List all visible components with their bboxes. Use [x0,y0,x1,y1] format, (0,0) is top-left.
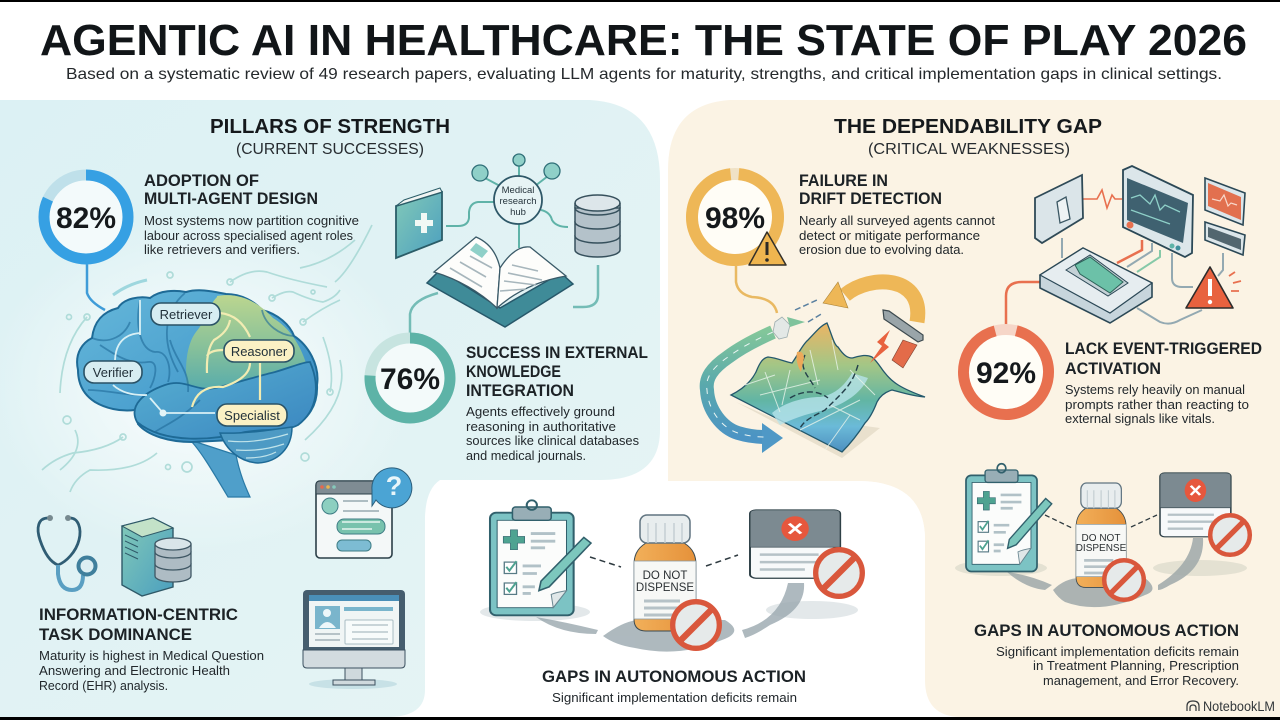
connectors: knowledge hub to ring 76 [410,265,598,334]
ring: 76 percent [370,338,450,418]
text block: gaps in autonomous action centre: Significant implementation deficits remain [552,691,797,705]
text block: information-centric task dominance: Answering and Electronic Health [39,664,230,678]
heading: dependability gap: THE DEPENDABILITY GAP [834,116,1102,138]
role label: Reasoner: Reasoner [231,344,288,359]
icon: warning triangle [749,232,786,265]
illustration: monitor and event switch [1035,166,1245,324]
icon: stethoscope [38,515,96,590]
ring: 92 percent [954,320,1058,424]
ring: 82 percent [44,175,128,259]
illustration: central autonomous action gaps [480,500,862,652]
text block: drift detection: DRIFT DETECTION [799,190,942,208]
small dark screen [1205,222,1245,255]
medicine bottle: DO NOT [1082,533,1120,544]
heading: pillars of strength: PILLARS OF STRENGTH [210,116,450,138]
role label: Verifier [84,361,142,383]
ring: 92 percent: 92% [976,357,1036,390]
text block: event-triggered activation: external signals like vitals. [1065,412,1215,426]
clipboard [490,500,591,615]
icon: chat window with question: ? [386,471,402,501]
illustration: drift map with arrows [707,282,925,458]
role label: Specialist: Specialist [224,408,280,423]
icon: open book [427,237,573,327]
text block: event-triggered activation: prompts rather than reacting to [1065,398,1249,412]
text block: information-centric task dominance: TASK DOMINANCE [39,626,192,644]
heading: pillars of strength: (CURRENT SUCCESSES) [236,141,424,158]
text block: multi-agent design [144,172,359,257]
role label: Reasoner [224,340,294,362]
alert triangle [1186,267,1241,308]
medicine bottle: DISPENSE [1076,543,1127,554]
ring: 76 percent: 76% [380,363,440,396]
text block: external knowledge integration: Agents effectively ground [466,405,615,419]
title: AGENTIC AI IN HEALTHCARE: THE STATE OF PLAY 2026 [40,16,1247,65]
hub circle: research [500,196,536,207]
brain folds [88,293,293,432]
text block: external knowledge integration: KNOWLEDGE [466,363,561,381]
connector: ring 82 to brain [87,264,105,310]
role label: Specialist [217,404,287,426]
text block: event-triggered activation: LACK EVENT-TRIGGERED [1065,340,1262,358]
icon: server with database [122,518,191,596]
map river band [772,373,868,425]
hub circle [494,176,542,224]
text block: multi-agent design: like retrievers and verifiers. [144,243,300,257]
role label: Verifier: Verifier [93,365,134,380]
heading: dependability gap [834,116,1102,158]
medicine bottle: DISPENSE [636,582,694,594]
icon: database [575,195,620,257]
medicine bottle [634,515,696,631]
icon: chat window with question [316,468,412,558]
panel: pillars of strength background [0,100,660,717]
icon: medical book [396,188,442,258]
illustration: brain with agent roles [77,290,317,497]
clipboard [966,464,1052,571]
role label: Retriever [151,303,220,325]
ground shadows [480,603,590,621]
brain stem [190,440,250,497]
text block: event-triggered activation: ACTIVATION [1065,360,1161,378]
small red screen [1205,178,1245,225]
text block: external knowledge integration: SUCCESS IN EXTERNAL [466,344,648,362]
illustration: medical research hub [396,154,620,327]
text block: gaps in autonomous action right: GAPS IN AUTONOMOUS ACTION [974,622,1239,640]
dashes [1045,515,1157,528]
map orange fold [796,352,804,372]
green-blue curved arrow [707,332,773,437]
text block: external knowledge integration: INTEGRATION [466,382,574,400]
text block: gaps in autonomous action centre: GAPS IN AUTONOMOUS ACTION [542,668,806,686]
prohibit sign on card [816,550,862,596]
map ground shadow [736,402,880,458]
brain lower lobe [135,362,316,439]
heading: pillars of strength [210,116,450,158]
heading: dependability gap: (CRITICAL WEAKNESSES) [868,141,1070,158]
text block: gaps in autonomous action right: Significant implementation deficits remain [996,645,1239,659]
ring: 98 percent [688,170,786,265]
rocker switch base [1040,248,1152,323]
prohibit sign on bottle [673,602,719,648]
illustration: right autonomous action gaps [955,464,1250,607]
text block: external knowledge integration: sources like clinical databases [466,434,639,448]
ground shadows [955,560,1047,576]
text block: information-centric task dominance: Record (EHR) analysis. [39,679,168,693]
text block: external knowledge integration [466,344,648,463]
ring: 98 percent: 98% [705,202,765,235]
text block: information-centric task dominance [39,606,264,693]
text block: event-triggered activation [1065,340,1262,426]
ring: 82 percent: 82% [56,202,116,235]
text block: drift detection [799,172,996,257]
text block: gaps in autonomous action right: management, and Error Recovery. [1043,674,1239,688]
hub circle: hub [510,207,526,218]
text block: drift detection: Nearly all surveyed agents cannot [799,214,996,228]
cerebellum [220,427,292,463]
panel: dependability gap background [668,100,1280,717]
brain green region [186,295,306,392]
hub circle: Medical [502,185,534,196]
broken red arc [892,340,917,368]
dashes [590,555,738,567]
hub network lines [446,166,568,248]
subtitle: Based on a systematic review of 49 research papers, evaluating LLM agents for maturity, strengths, and critical implementation gaps in clinical settings. [66,66,1222,83]
orange curved arrow [823,282,918,322]
text block: external knowledge integration: reasoning in authoritative [466,420,616,434]
connector: ring 92 to switch [1006,282,1040,327]
brain signal paths [192,313,260,407]
error card [750,510,840,578]
icon: desktop monitor with record [303,590,405,689]
wires [1062,238,1223,324]
text block: drift detection: FAILURE IN [799,172,888,190]
panel: central gaps background [425,481,925,717]
connector: ring 98 to map [736,264,777,313]
text block: multi-agent design: labour across specialised agent roles [144,229,353,243]
vitals monitor [1123,166,1193,257]
hub satellite nodes [472,154,560,181]
text block: multi-agent design: ADOPTION OF [144,172,259,190]
medicine bottle: DO NOT [643,570,687,582]
prohibit sign on card [1210,515,1250,555]
error card [1160,473,1231,537]
text block: information-centric task dominance: Maturity is highest in Medical Question [39,649,264,663]
text block: gaps in autonomous action centre [542,668,806,705]
map grid lines [745,340,875,450]
map terrain [731,323,925,452]
text block: event-triggered activation: Systems rely heavily on manual [1065,383,1245,397]
role label: Retriever: Retriever [160,307,213,322]
brain glow backdrop [0,215,415,555]
sensor lever [883,310,923,342]
text block: information-centric task dominance: INFORMATION-CENTRIC [39,606,238,624]
text block: drift detection: erosion due to evolving data. [799,243,964,257]
lightning [870,330,890,363]
text block: external knowledge integration: and medical journals. [466,449,586,463]
brain body [77,290,317,442]
broken link marker [773,300,823,339]
text block: drift detection: detect or mitigate performance [799,229,980,243]
text block: multi-agent design: MULTI-AGENT DESIGN [144,190,318,208]
text block: multi-agent design: Most systems now partition cognitive [144,214,359,228]
wall switch [1035,175,1083,243]
text block: gaps in autonomous action right: in Treatment Planning, Prescription [1033,659,1239,673]
text block: gaps in autonomous action right [974,622,1239,688]
signal wisps around brain [42,225,372,492]
medicine bottle [1076,483,1127,587]
prohibit sign on bottle [1104,560,1144,600]
